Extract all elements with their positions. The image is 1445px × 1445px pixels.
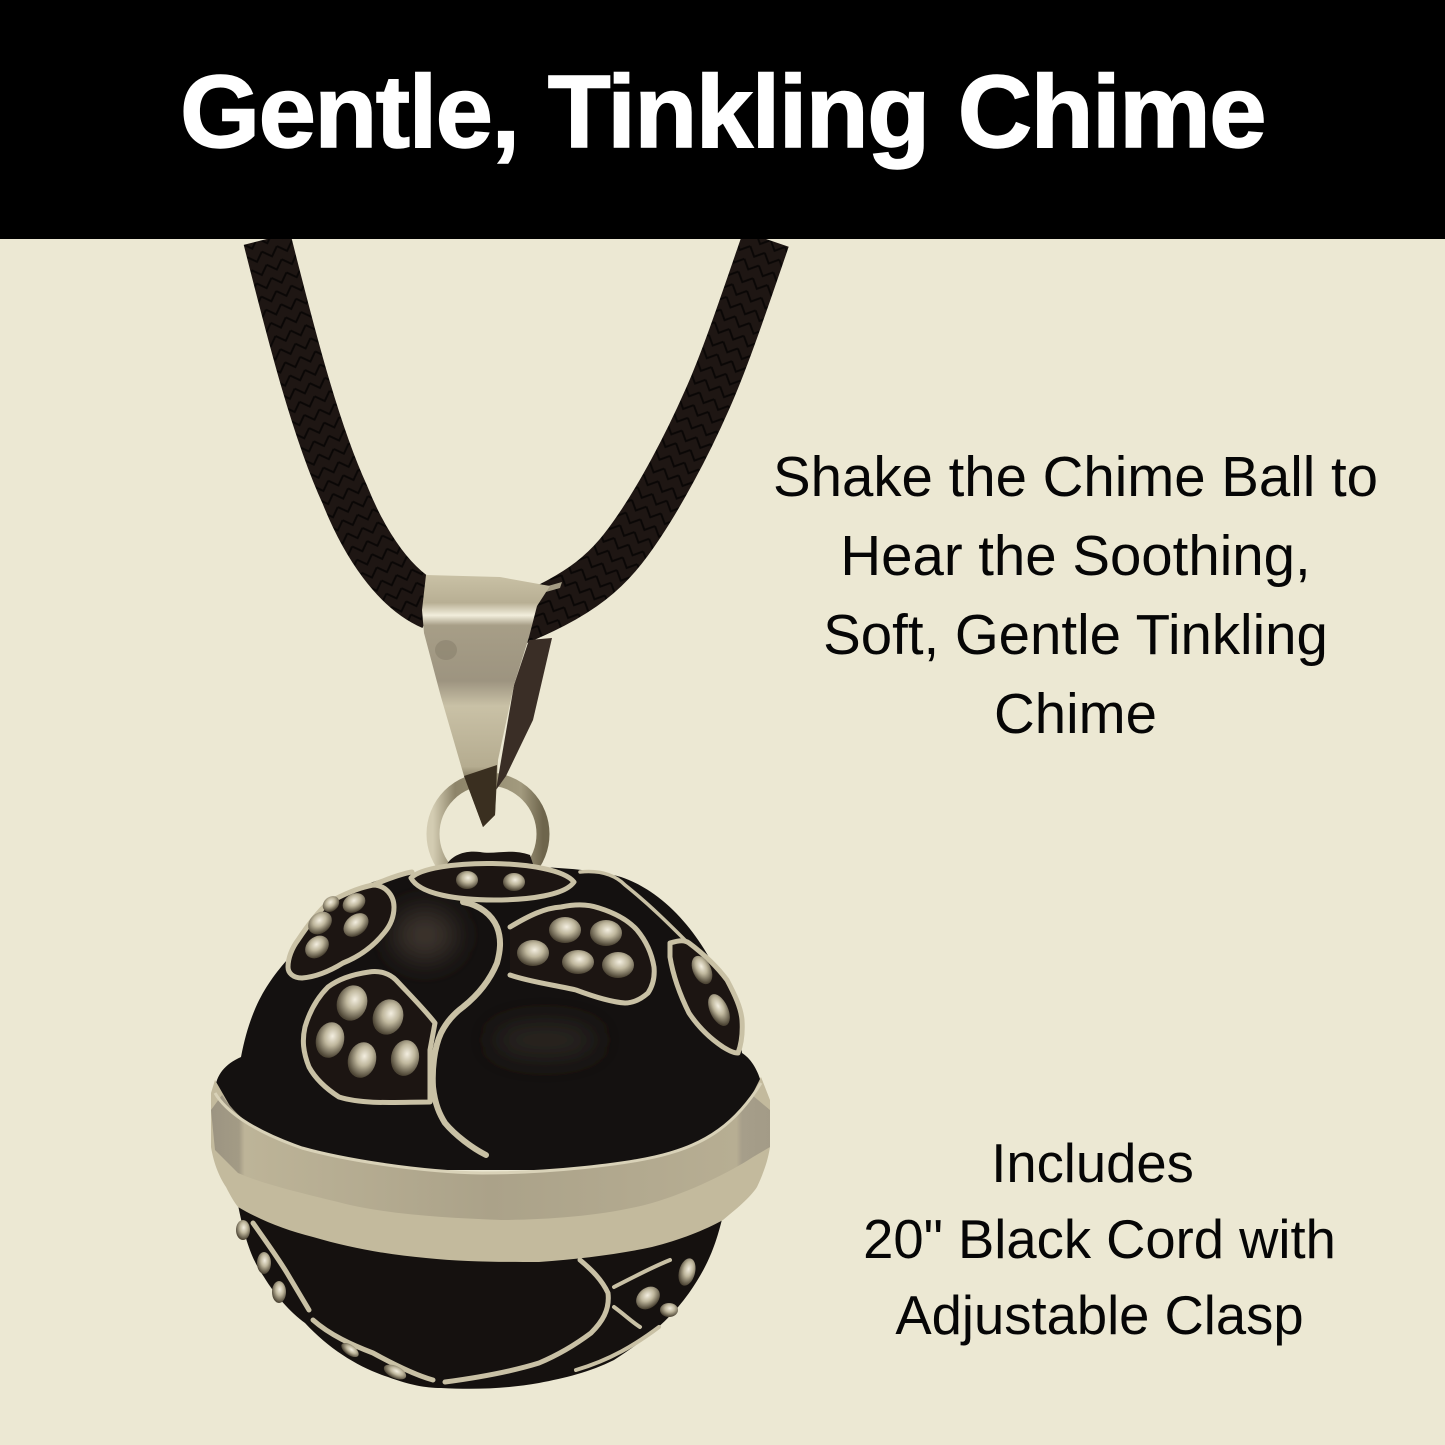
text block: includes cord: 20" Black Cord with <box>863 1209 1336 1270</box>
bail <box>422 575 562 827</box>
text block: includes cord: Adjustable Clasp <box>895 1285 1304 1346</box>
text block: shake the chime ball <box>773 445 1378 745</box>
lower right leaf <box>614 1260 670 1327</box>
text block: shake the chime ball: Shake the Chime Ball to <box>773 445 1378 508</box>
header band <box>0 0 1445 239</box>
text block: includes cord: Includes <box>991 1133 1194 1194</box>
text block: includes cord <box>863 1133 1336 1346</box>
text block: shake the chime ball: Soft, Gentle Tinkling <box>823 603 1328 666</box>
lower part of upper ball behind band <box>238 1110 740 1170</box>
lower ball <box>238 1205 723 1389</box>
jump ring <box>433 779 543 889</box>
lower right edge <box>576 1327 659 1370</box>
upper ball <box>215 867 761 1135</box>
top cap <box>411 863 574 900</box>
metal band <box>211 1077 770 1262</box>
bottom curve <box>445 1260 608 1382</box>
top edge ornament lines <box>373 872 412 885</box>
ball ornaments <box>253 863 742 1382</box>
ball surface highlights <box>393 909 600 1058</box>
leaf: far right <box>670 941 742 1053</box>
title: Gentle, Tinkling Chime <box>180 54 1265 169</box>
ornament dots <box>236 871 734 1383</box>
cord <box>267 239 766 628</box>
leaf: upper right <box>510 905 654 1003</box>
leaf: upper left <box>288 885 394 978</box>
leaf: lower left <box>303 971 435 1103</box>
black bump at top of ball <box>445 852 535 870</box>
text block: shake the chime ball: Chime <box>994 682 1157 745</box>
bottom left curve <box>313 1320 433 1380</box>
text block: shake the chime ball: Hear the Soothing, <box>840 524 1311 587</box>
S curve <box>433 902 500 1155</box>
lower left curve <box>253 1223 309 1310</box>
